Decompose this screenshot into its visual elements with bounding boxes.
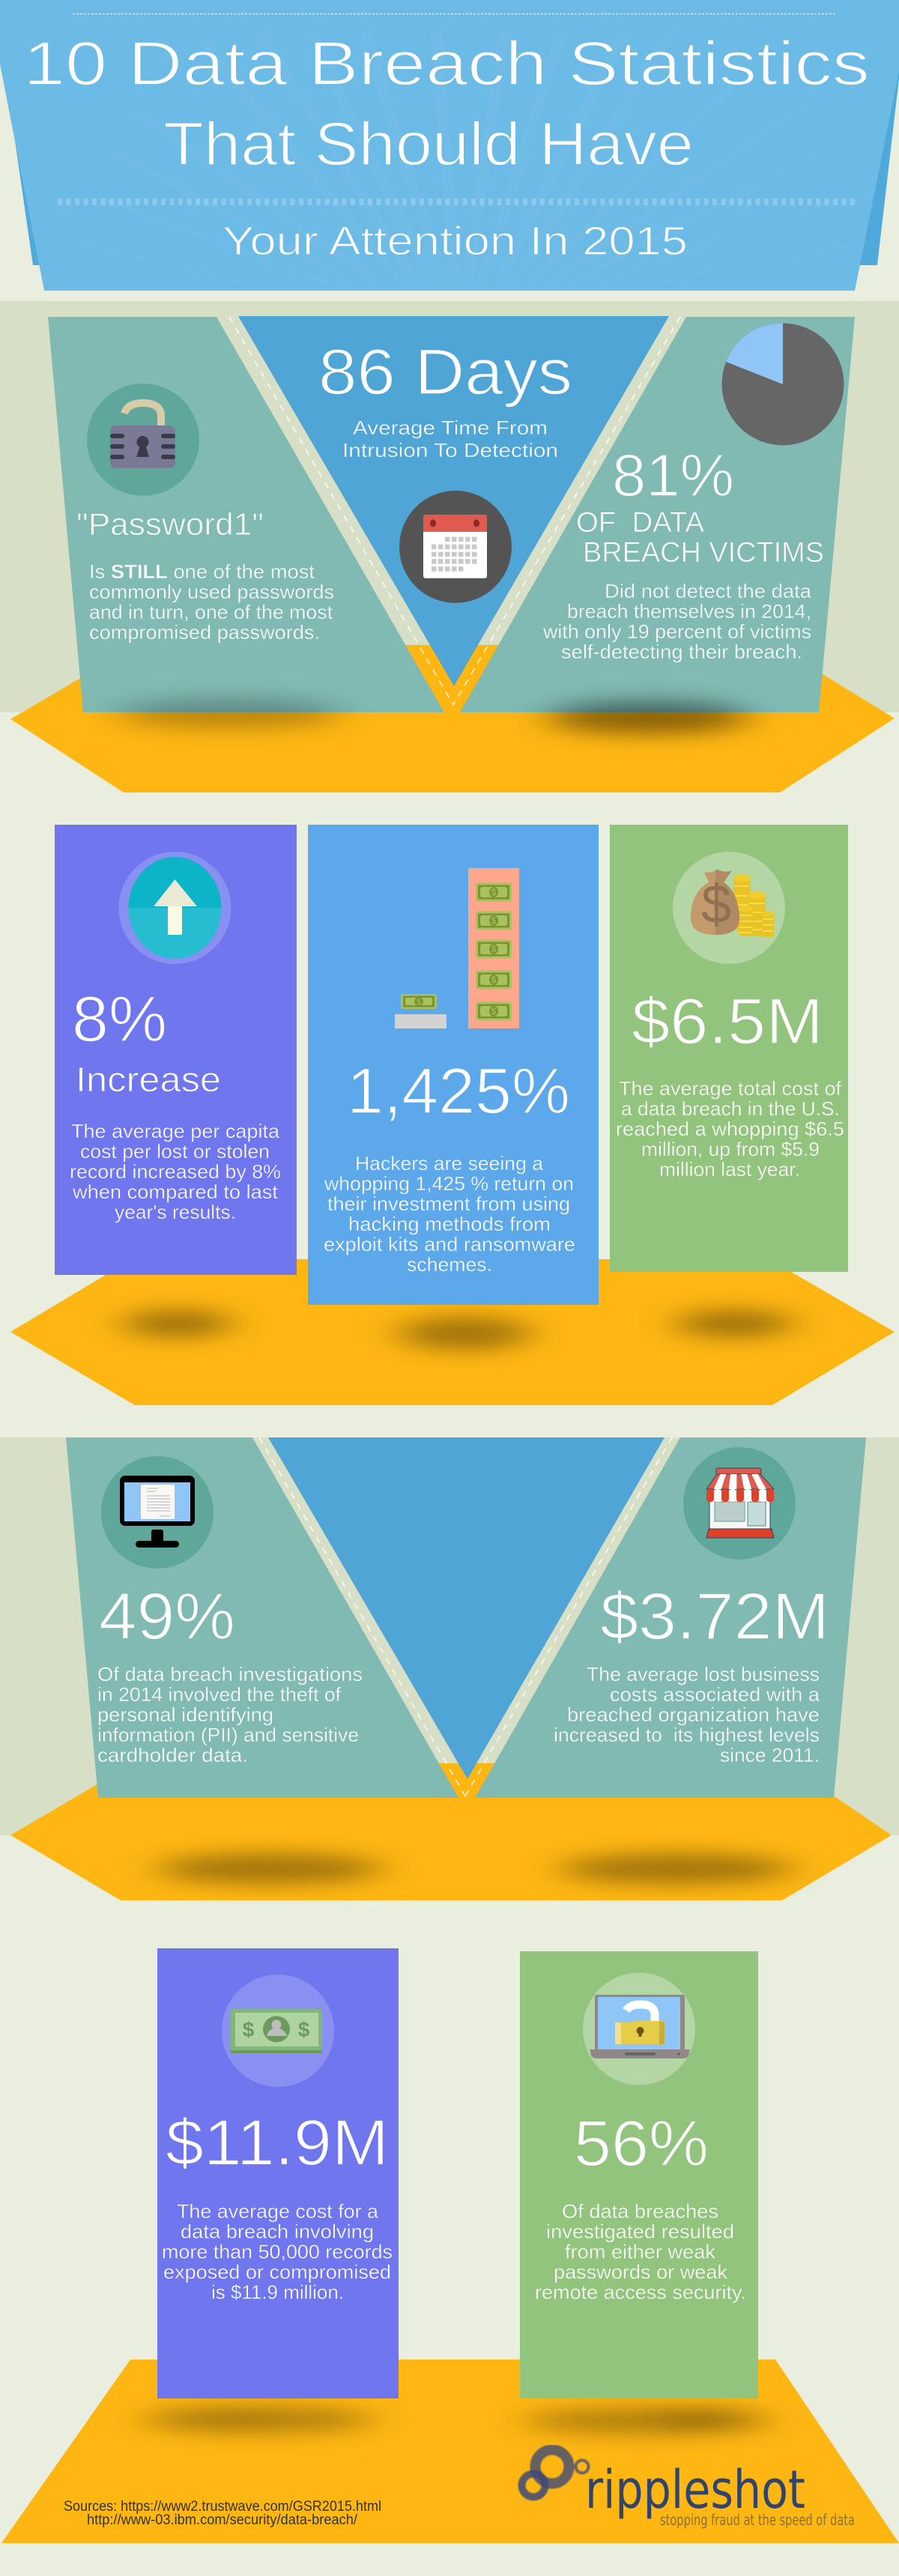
text: 56% description: remote access security.	[535, 2281, 746, 2303]
icon: money bag and coins: $	[701, 875, 731, 935]
sources: http://www-03.ibm.com/security/data-breach/	[87, 2512, 358, 2528]
section 3 road strip end	[435, 1763, 497, 1798]
section 3 wall	[0, 1437, 899, 1835]
icon: money bag and coins	[673, 852, 785, 964]
icon: bill stacks: $	[491, 915, 497, 926]
icon: bill stacks: $	[417, 998, 421, 1007]
text: hackers description: schemes.	[407, 1253, 492, 1276]
section 3 floor	[10, 1784, 892, 1900]
text: 49% description: in 2014 involved the theft of	[97, 1683, 342, 1706]
text: victims description: Did not detect the data	[605, 580, 812, 602]
text: password description: and in turn, one of the most	[89, 601, 333, 623]
logo: rippleshot: rippleshot	[585, 2459, 805, 2521]
text: password description: Is STILL one of the most	[89, 560, 315, 583]
text: increase description	[70, 1120, 281, 1223]
text: 56% description: Of data breaches	[562, 2200, 718, 2222]
icon: dollar bill: $	[243, 2018, 255, 2041]
text: $3.72M description	[554, 1663, 820, 1766]
icon: laptop with open lock	[583, 1973, 695, 2085]
text: 56% description: passwords or weak	[554, 2261, 728, 2283]
title: That Should Have	[163, 110, 694, 178]
text: hackers description	[324, 1152, 575, 1276]
panel: 8% increase	[55, 825, 297, 1275]
text: total cost description: The average total cost of	[619, 1077, 842, 1100]
text: 49% description: Of data breach investigations	[97, 1663, 363, 1685]
panel: $6.5M	[610, 825, 848, 1272]
text: hackers description: their investment from using	[327, 1192, 570, 1215]
sources: Sources: https://www2.trustwave.com/GSR2015.html	[64, 2499, 381, 2515]
section 4 floor shadows	[142, 2407, 772, 2434]
text: total cost description	[616, 1077, 844, 1181]
chart: 81 percent pie	[722, 323, 844, 445]
panel: victims	[460, 317, 855, 712]
section 4 floor	[1, 2360, 899, 2543]
text: total cost description: million, up from $5.9	[641, 1138, 820, 1160]
text: 49% description: information (PII) and sensitive	[97, 1724, 359, 1746]
section 1 road strips	[405, 645, 499, 712]
text: 56% description: from either weak	[565, 2240, 716, 2263]
text: total cost description: million last year.	[659, 1158, 800, 1181]
text: increase description: when compared to last	[72, 1181, 279, 1203]
text: victims description: with only 19 percent of victims	[542, 620, 811, 643]
stat: 56%: 56%	[574, 2108, 709, 2180]
text: victims description: self-detecting their breach.	[561, 640, 802, 663]
text: 49% description	[97, 1663, 363, 1766]
icon: up arrow	[118, 852, 231, 964]
section 1 floor shadows	[117, 699, 749, 734]
panel: 1,425%	[308, 825, 599, 1305]
section 3 dashed lines	[259, 1437, 672, 1796]
text: increase description: cost per lost or stolen	[80, 1140, 270, 1163]
text: hackers description: Hackers are seeing a	[355, 1152, 544, 1175]
sources	[64, 2499, 381, 2528]
section 1 center triangle	[238, 316, 669, 686]
text: hackers description: exploit kits and ransomware	[324, 1233, 575, 1255]
stat: 49%: 49%	[99, 1579, 235, 1653]
text: 56% description	[535, 2200, 746, 2303]
icon: calendar	[399, 491, 512, 603]
title: Your Attention In 2015	[223, 219, 688, 264]
text: $11.9M description: more than 50,000 records	[162, 2240, 393, 2263]
text: hackers description: hacking methods from	[348, 1213, 551, 1235]
heading: of data breach victims: BREACH VICTIMS	[583, 537, 824, 569]
text: victims description	[542, 580, 812, 663]
section 2 floor	[10, 1259, 895, 1405]
icon: bill stacks: $	[491, 1006, 497, 1016]
icon: bill stacks: $	[491, 887, 497, 897]
text: $11.9M description: The average cost for a	[177, 2200, 379, 2222]
panel: $3.72M	[475, 1437, 866, 1798]
text: $3.72M description: breached organization have	[567, 1703, 820, 1726]
panel: $11.9M	[157, 1948, 399, 2398]
icon: storefront	[683, 1447, 796, 1560]
stat: $6.5M: $6.5M	[632, 986, 823, 1058]
text: password description: commonly used passwords	[89, 581, 334, 603]
text: $11.9M description: exposed or compromised	[163, 2261, 391, 2283]
icon: dollar bill	[222, 1975, 334, 2087]
text: $11.9M description: is $11.9 million.	[211, 2281, 344, 2303]
section 3 center triangle	[268, 1437, 665, 1779]
header banner	[0, 0, 899, 291]
icon: bill stacks: $	[491, 944, 497, 954]
section 1 wall	[0, 301, 899, 712]
text: $3.72M description: costs associated with a	[610, 1683, 820, 1706]
text: total cost description: a data breach in the U.S.	[621, 1097, 840, 1120]
text: 56% description: investigated resulted	[546, 2220, 734, 2243]
label: Increase: Increase	[76, 1060, 221, 1099]
text: 49% description: personal identifying	[97, 1703, 273, 1726]
text: average time	[342, 416, 558, 461]
title	[23, 28, 870, 264]
icon: monitor with document	[101, 1456, 214, 1569]
heading: 86 Days: 86 Days	[318, 336, 572, 408]
section 1 floor	[10, 674, 895, 793]
icon: open padlock	[87, 384, 199, 496]
section 2 floor shadows	[124, 1310, 793, 1350]
text: 49% description: cardholder data.	[97, 1744, 248, 1766]
text: $3.72M description: increased to its highest levels	[554, 1724, 820, 1746]
logo: rippleshot	[521, 2449, 855, 2529]
text: hackers description: whopping 1,425 % return on	[324, 1172, 574, 1195]
text: $3.72M description: since 2011.	[720, 1744, 820, 1766]
heading: of data breach victims: OF DATA	[576, 507, 705, 539]
panel: 56%	[520, 1951, 758, 2398]
panel: password	[48, 317, 444, 712]
panel: 49%	[66, 1437, 458, 1798]
text: $11.9M description	[162, 2200, 393, 2303]
icon: bill stacks: $	[491, 975, 497, 985]
icon: dollar bill: $	[298, 2018, 310, 2041]
text: average time: Average Time From	[353, 416, 548, 439]
text: increase description: The average per capita	[71, 1120, 280, 1142]
heading: Password1: "Password1"	[76, 506, 264, 542]
text: victims description: breach themselves in 2014,	[567, 600, 811, 622]
text: total cost description: reached a whopping $6.5	[616, 1118, 844, 1140]
text: average time: Intrusion To Detection	[342, 439, 558, 461]
stat: 8%: 8%	[72, 984, 167, 1055]
icon: bill stacks	[395, 868, 519, 1028]
title: 10 Data Breach Statistics	[23, 28, 870, 98]
text: password description: compromised passwords.	[89, 621, 320, 643]
text: increase description: year's results.	[115, 1201, 236, 1223]
stat: $11.9M: $11.9M	[166, 2107, 389, 2179]
text: password description	[89, 560, 334, 643]
section 3 floor shadows	[157, 1854, 793, 1884]
section 1 dashed lines	[229, 317, 680, 705]
text: $11.9M description: data breach involving	[181, 2220, 374, 2243]
heading: 81%: 81%	[612, 442, 734, 509]
heading: of data breach victims	[576, 507, 824, 569]
text: $3.72M description: The average lost business	[587, 1663, 820, 1685]
stat: $3.72M: $3.72M	[600, 1579, 829, 1653]
stat: 1,425%: 1,425%	[347, 1055, 570, 1127]
text: increase description: record increased by 8%	[70, 1160, 281, 1183]
